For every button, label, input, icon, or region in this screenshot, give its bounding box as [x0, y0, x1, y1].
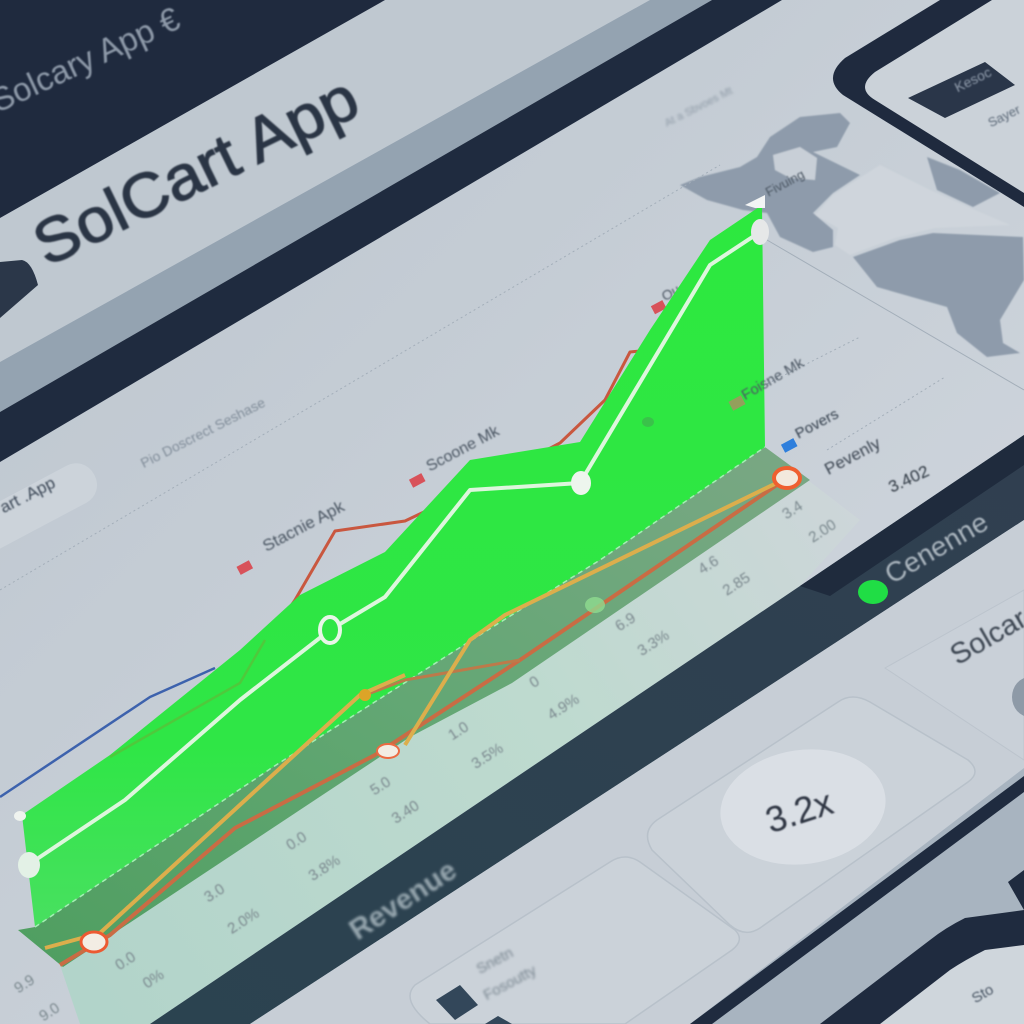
- text: At a Sbvoes Mt: [663, 85, 735, 130]
- axis tick labels: 0: [526, 673, 543, 692]
- axis tick labels: 4.9%: [545, 691, 583, 724]
- lower KPI panel: Fosoutty: [480, 962, 540, 1004]
- legend labels: Fivuing: [763, 167, 807, 199]
- list text: Snetn: [474, 944, 516, 978]
- area fill: [22, 205, 765, 927]
- axis tick labels: 0.0: [283, 828, 310, 854]
- legend labels: Povers: [792, 406, 841, 442]
- axis tick labels: 4.6: [695, 552, 722, 578]
- axis tick labels: [11, 497, 839, 1024]
- red-orange line: [60, 478, 787, 965]
- axis tick labels: 6.9: [612, 609, 639, 635]
- faint line through area: [110, 640, 265, 757]
- legend labels: Stacnie Apk: [259, 496, 348, 556]
- white peak marker: [745, 195, 765, 208]
- legend labels: [236, 167, 932, 575]
- map: world continents: [680, 113, 1024, 357]
- bottom-right stripe and device: Sto: [969, 981, 997, 1007]
- chart subtitle: Pio Doscrect Seshase: [138, 394, 268, 471]
- green area chart: [14, 195, 810, 967]
- axis tick labels: 3.0: [201, 880, 228, 906]
- title: SolCart App: [23, 63, 369, 280]
- header band: [0, 0, 782, 462]
- chart grid lines: [0, 165, 1024, 590]
- axis tick labels: 9.9: [11, 971, 38, 997]
- legend labels: 3.402: [885, 461, 932, 497]
- app logo tile: [0, 260, 38, 318]
- axis tick labels: 0%: [140, 966, 167, 992]
- white line: [28, 232, 760, 865]
- KPI circle: [713, 739, 893, 875]
- yellow dot: [359, 689, 371, 701]
- legend labels: Scoone Mk: [424, 422, 503, 475]
- side card: [885, 590, 1024, 760]
- mint floor strip below chart: [60, 478, 860, 1024]
- floor dashed edge: [35, 447, 765, 927]
- top-right device frame: Kesoc: [952, 64, 994, 95]
- pill: app tag: [0, 456, 104, 564]
- axis tick labels: 2.0%: [225, 905, 263, 938]
- red line: [238, 350, 650, 683]
- band status dot: [858, 580, 888, 604]
- card: circle KPI: [648, 697, 975, 932]
- side icon: [1012, 677, 1024, 717]
- axis tick labels: 3.4: [779, 497, 806, 523]
- blue line: [0, 668, 215, 797]
- legend labels: Pevenly: [821, 433, 884, 479]
- band label: Cenenne: Cenenne: [879, 506, 993, 590]
- axis tick labels: 1.0: [445, 718, 472, 744]
- card: list: [410, 857, 739, 1024]
- bottom-right stripe and device: [690, 768, 1024, 1024]
- green ghost marker: [585, 597, 605, 613]
- green area chart: Foisne Mk: [739, 354, 807, 404]
- yellow line: [45, 675, 405, 948]
- axis tick labels: 2.00: [806, 516, 839, 546]
- top-right device frame: Sayer: [985, 101, 1023, 130]
- axis tick labels: 2.85: [720, 569, 753, 599]
- axis tick labels: 0.0: [112, 948, 139, 974]
- lower teal band: [150, 435, 1024, 1024]
- chart back lines: [0, 350, 650, 797]
- orange and red floor lines: [45, 468, 800, 965]
- KPI value: 3.2x: [760, 781, 838, 841]
- ring markers: [81, 932, 107, 952]
- axis tick labels: 5.0: [367, 773, 394, 799]
- axis tick labels: 3.8%: [306, 852, 344, 885]
- list icon: [436, 985, 478, 1020]
- axis tick labels: 3.40: [389, 797, 422, 827]
- axis tick labels: 3.3%: [635, 627, 673, 660]
- white markers: [18, 852, 40, 878]
- top-right device frame: [833, 0, 1024, 207]
- axis tick labels: 3.5%: [469, 740, 507, 773]
- legend labels: Ou: [659, 281, 683, 304]
- chart floor: [18, 447, 810, 967]
- lower KPI panel: [250, 520, 1024, 1024]
- dark button: [908, 62, 1015, 118]
- band label: Revenue: Revenue: [344, 854, 463, 947]
